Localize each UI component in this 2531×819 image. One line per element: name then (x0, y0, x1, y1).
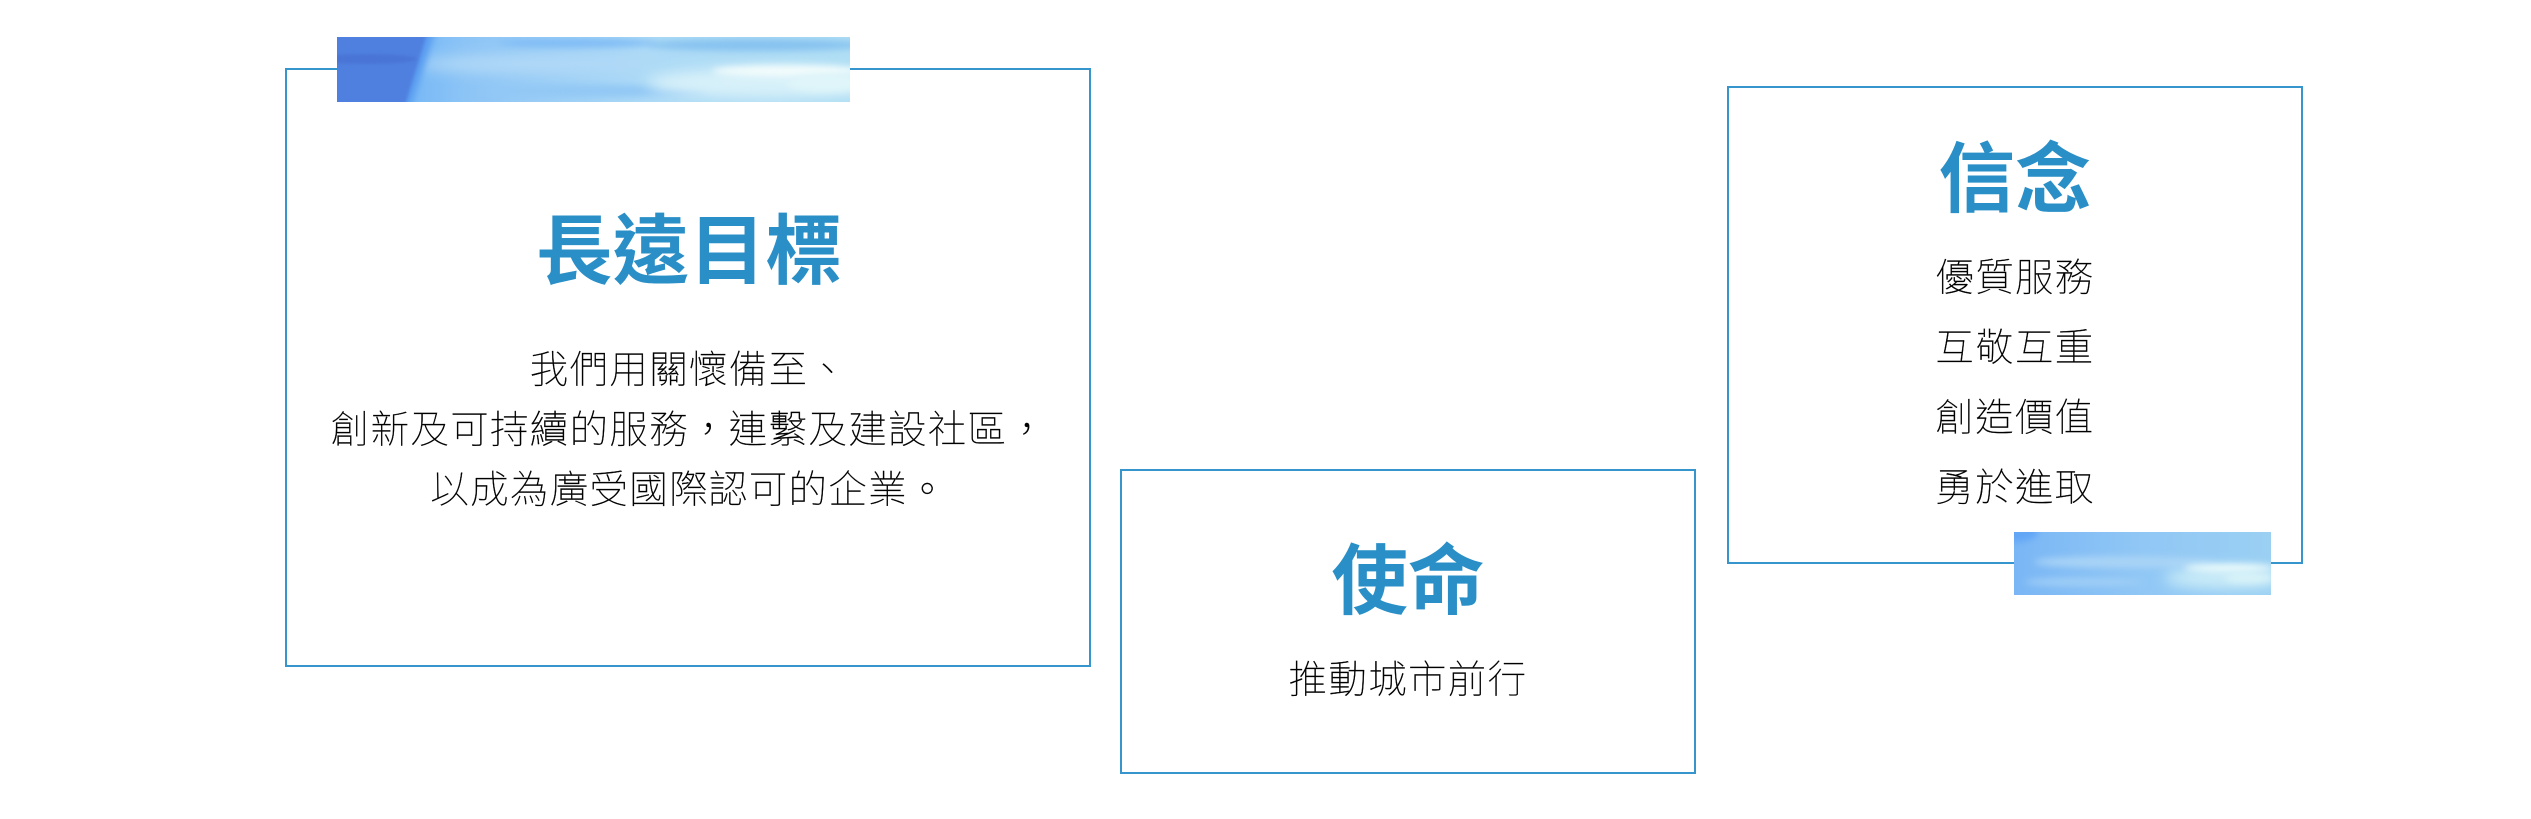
text block: beliefs list: 互敬互重 (1935, 327, 2095, 370)
panel: long-term goal (285, 68, 1091, 667)
heading: beliefs: 信念 (1938, 138, 2092, 223)
heading: mission: 使命 (1332, 540, 1484, 625)
text block: mission body: 推動城市前行 (1289, 659, 1527, 702)
banner: watercolor strip bottom (2014, 532, 2271, 595)
text block: long-term goal body: 我們用關懷備至、 (530, 349, 848, 392)
text block: beliefs list: 創造價值 (1935, 397, 2095, 440)
heading: long-term goal: 長遠目標 (536, 210, 842, 295)
panel: beliefs (1727, 86, 2303, 564)
text block: long-term goal body: 以成為廣受國際認可的企業。 (430, 469, 948, 512)
panel: mission (1120, 469, 1696, 774)
text block: beliefs list: 優質服務 (1935, 257, 2095, 300)
banner: watercolor strip top (337, 37, 850, 102)
text block: long-term goal body: 創新及可持續的服務，連繫及建設社區， (331, 409, 1047, 452)
text block: long-term goal body (331, 349, 1047, 512)
text block: beliefs list (1935, 257, 2095, 510)
text block: beliefs list: 勇於進取 (1935, 467, 2095, 510)
